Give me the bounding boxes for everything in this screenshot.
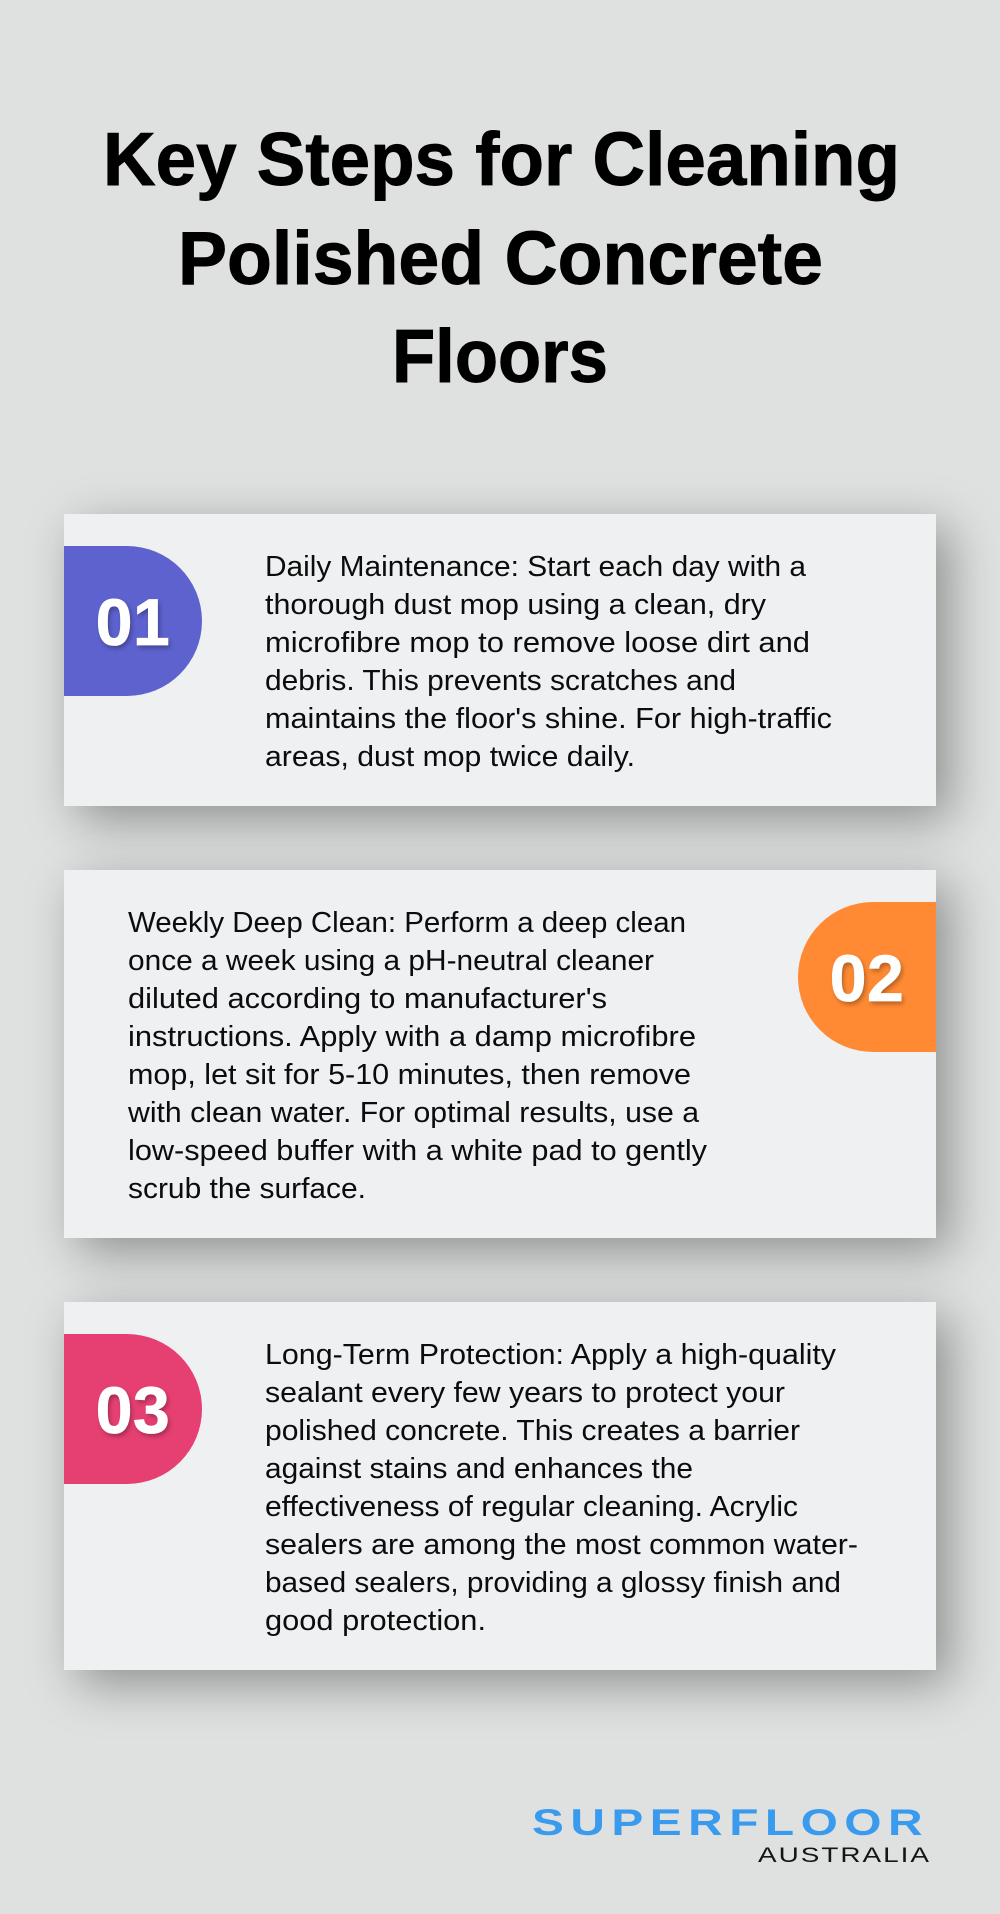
text block: weekly deep clean: with clean water. For optimal results, use a	[127, 1097, 700, 1129]
badge: step 01	[64, 546, 202, 696]
text block: long-term protection: polished concrete. This creates a barrier	[265, 1415, 800, 1447]
text block: daily maintenance: debris. This prevents scratches and	[265, 665, 736, 697]
badge: step 01: 01	[96, 585, 170, 659]
text block: daily maintenance: Daily Maintenance: Start each day with a	[265, 551, 807, 583]
text block: daily maintenance: maintains the floor's shine. For high-traffic	[265, 703, 832, 735]
text block: long-term protection: sealant every few years to protect your	[265, 1377, 785, 1409]
text block: weekly deep clean: once a week using a pH-neutral cleaner	[128, 945, 654, 977]
text block: weekly deep clean	[127, 907, 708, 1205]
text block: weekly deep clean: instructions. Apply with a damp microfibre	[128, 1021, 696, 1053]
logo: Superfloor Australia: SUPERFLOOR	[532, 1802, 929, 1843]
panel: step 1 card	[64, 514, 936, 806]
title: Polished Concrete	[178, 216, 823, 300]
text block: weekly deep clean: scrub the surface.	[128, 1173, 366, 1205]
text block: daily maintenance: thorough dust mop using a clean, dry	[265, 589, 767, 621]
badge: step 03	[64, 1334, 202, 1484]
text block: long-term protection: good protection.	[265, 1605, 486, 1637]
text block: weekly deep clean: low-speed buffer with a white pad to gently	[128, 1135, 708, 1167]
logo: Superfloor Australia	[532, 1802, 931, 1867]
text block: long-term protection: against stains and enhances the	[265, 1453, 693, 1485]
title: Floors	[392, 314, 608, 398]
badge: step 03: 03	[96, 1373, 170, 1447]
text block: daily maintenance: areas, dust mop twice daily.	[265, 741, 635, 773]
text block: weekly deep clean: mop, let sit for 5-10 minutes, then remove	[128, 1059, 691, 1091]
text block: long-term protection	[265, 1339, 858, 1637]
text block: long-term protection: effectiveness of regular cleaning. Acrylic	[265, 1491, 798, 1523]
text block: weekly deep clean: diluted according to manufacturer's	[128, 983, 607, 1015]
text block: daily maintenance	[265, 551, 832, 773]
logo: Superfloor Australia: AUSTRALIA	[758, 1844, 931, 1867]
text block: daily maintenance: microfibre mop to remove loose dirt and	[265, 627, 810, 659]
panel: step 2 card	[64, 870, 936, 1238]
text block: long-term protection: Long-Term Protection: Apply a high-quality	[265, 1339, 837, 1371]
text block: long-term protection: based sealers, providing a glossy finish and	[265, 1567, 841, 1599]
panel: step 3 card	[64, 1302, 936, 1670]
badge: step 02	[798, 902, 936, 1052]
text block: long-term protection: sealers are among the most common water-	[265, 1529, 858, 1561]
title	[103, 117, 900, 398]
text block: weekly deep clean: Weekly Deep Clean: Perform a deep clean	[128, 907, 686, 939]
badge: step 02: 02	[830, 941, 904, 1015]
title: Key Steps for Cleaning	[103, 117, 900, 201]
